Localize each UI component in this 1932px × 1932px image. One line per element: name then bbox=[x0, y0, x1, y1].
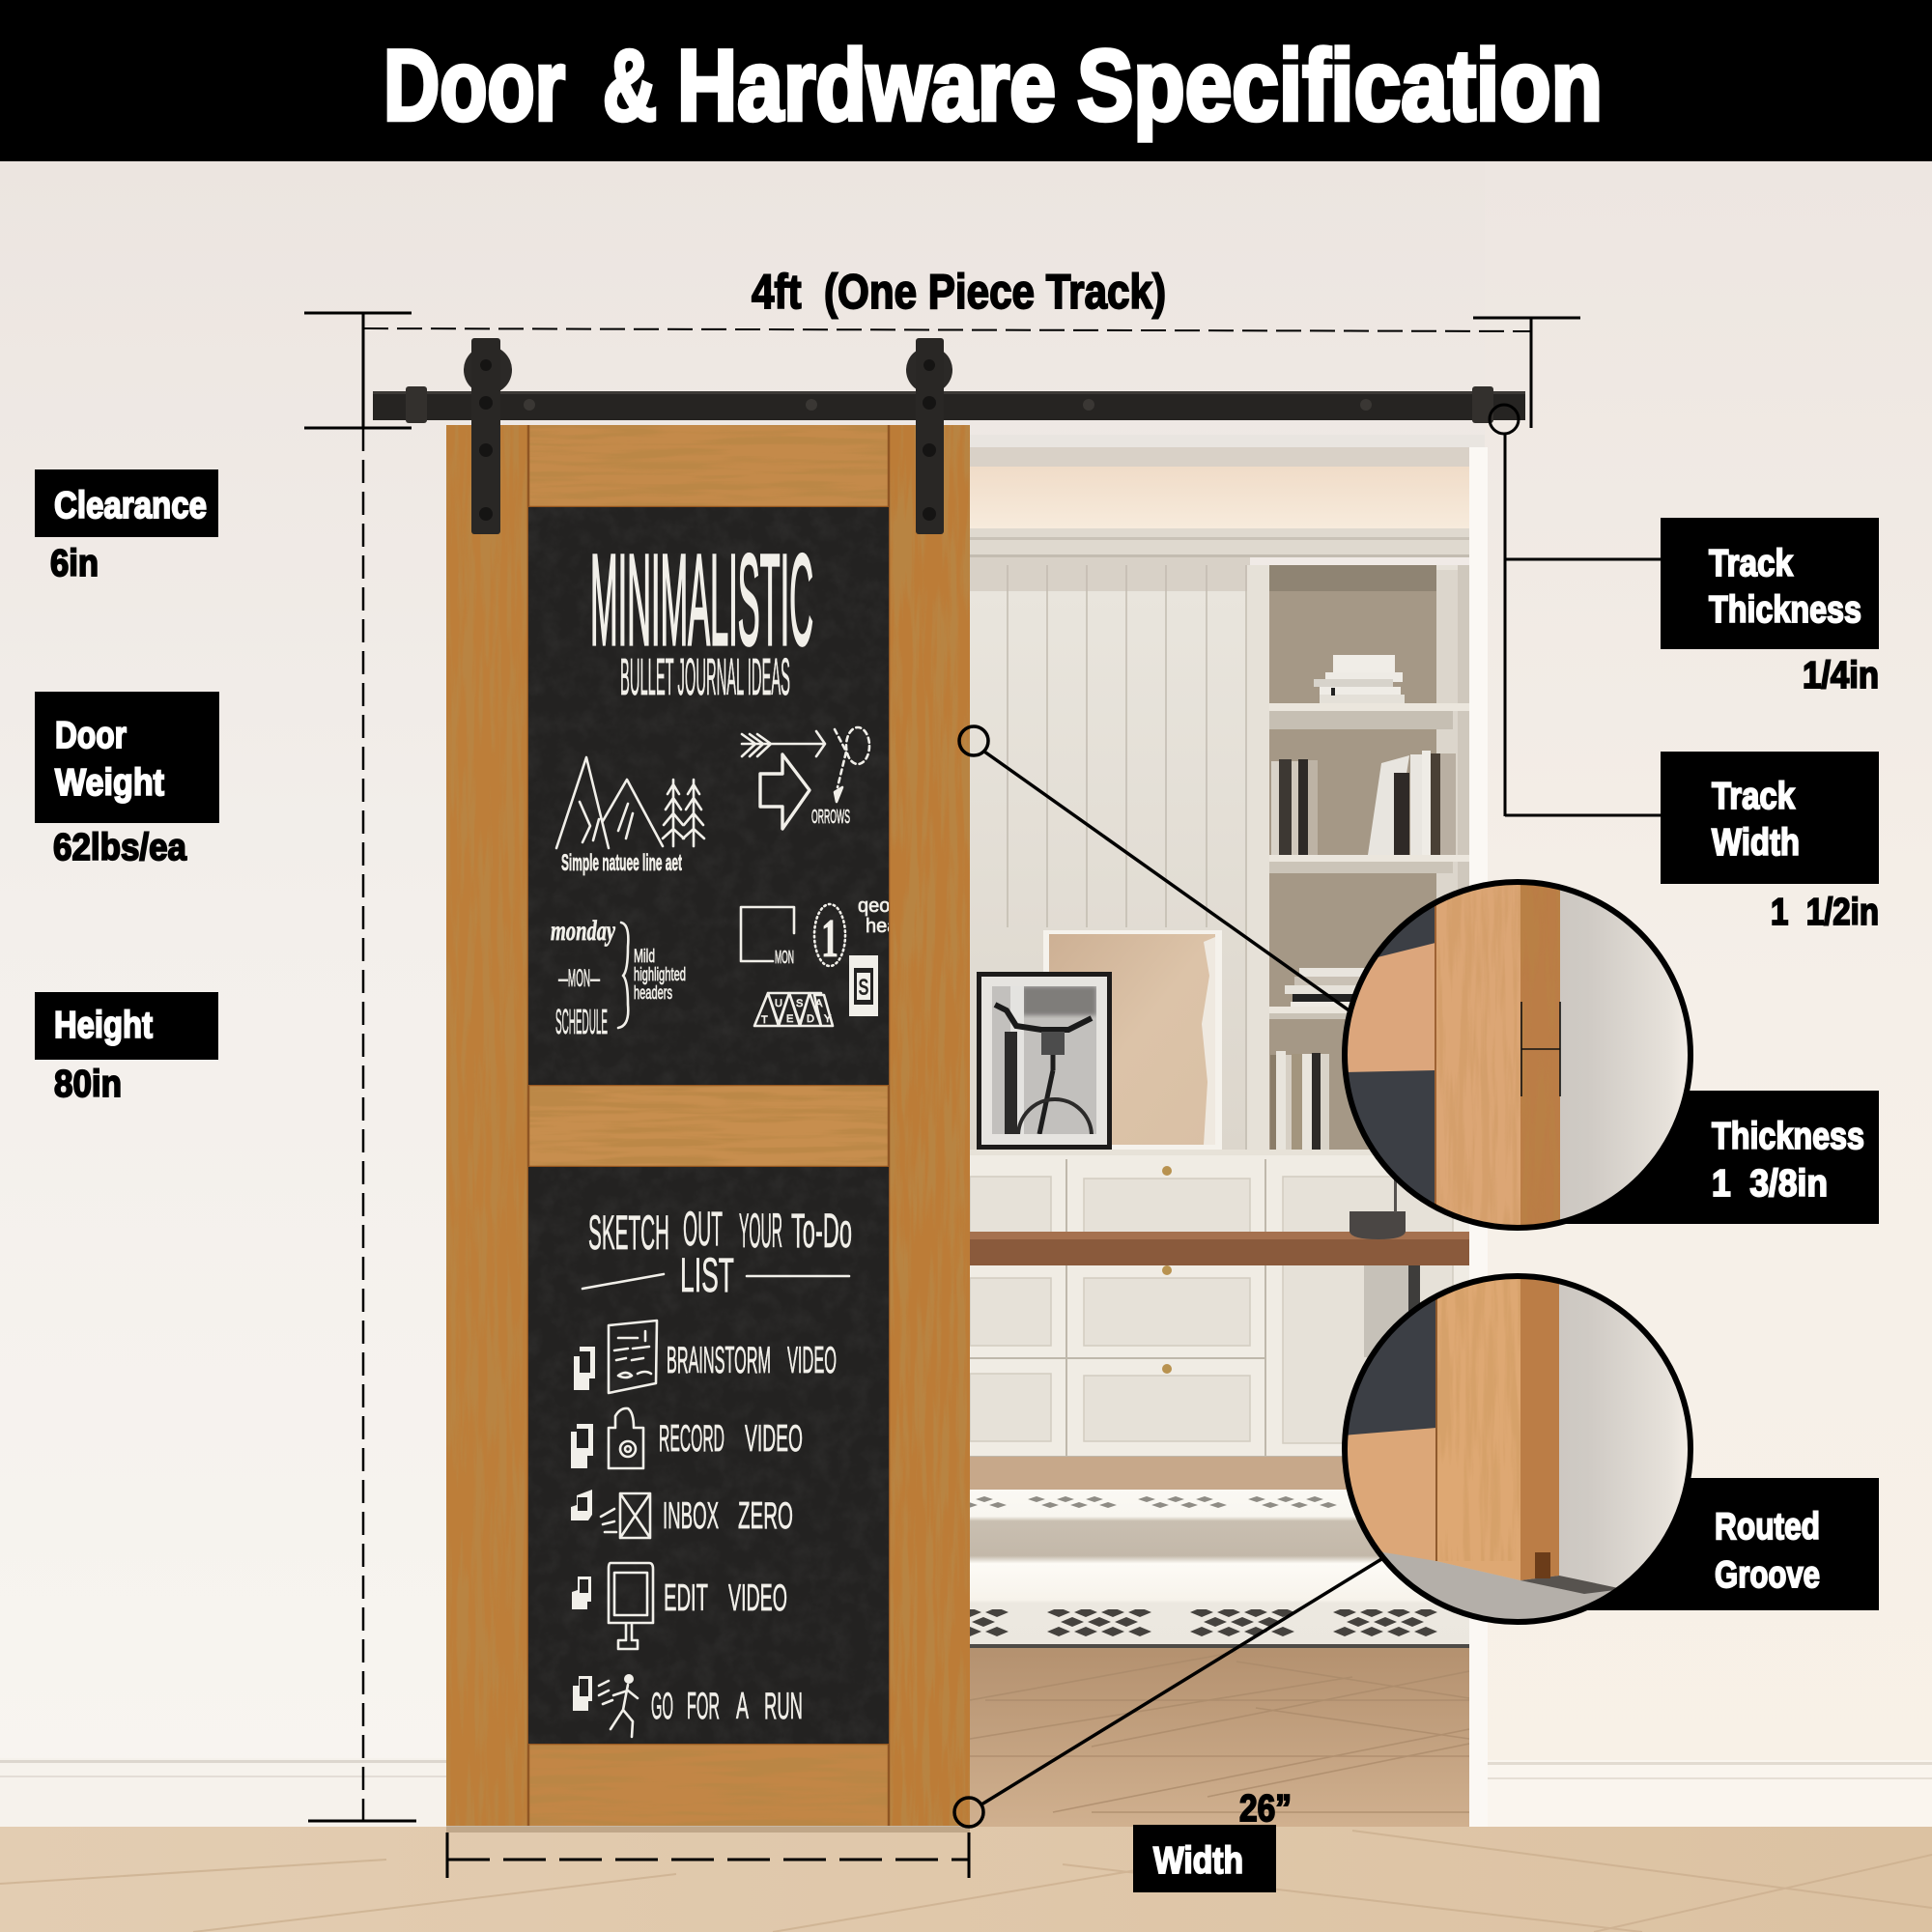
label: door weight: Door bbox=[55, 715, 127, 756]
framed artwork bbox=[1043, 930, 1222, 1150]
label: track thickness bbox=[1661, 518, 1879, 696]
row: inbox zero: ZERO bbox=[738, 1495, 793, 1537]
callout pointer: thickness bbox=[959, 726, 1354, 1014]
upper chalkboard: Simple natuee line aet bbox=[561, 850, 682, 876]
barn door bbox=[446, 425, 970, 1826]
label: track thickness: Track bbox=[1709, 543, 1793, 584]
doodle: tuesday bunting: E bbox=[786, 1013, 793, 1025]
left hanger bbox=[464, 338, 512, 534]
cabinets bbox=[970, 1150, 1469, 1459]
barn door track bbox=[373, 386, 1525, 423]
heading: sketch out your to-do bbox=[588, 1202, 852, 1260]
note: mild highlighted headers: highlighted bbox=[634, 965, 686, 985]
note: mild highlighted headers: headers bbox=[634, 983, 672, 1004]
label: track width: 1 1/2in bbox=[1771, 892, 1879, 933]
doodle: tuesday bunting: Y bbox=[824, 1013, 832, 1025]
label: routed groove: Groove bbox=[1715, 1554, 1820, 1596]
note: mild highlighted headers: Mild bbox=[634, 947, 655, 967]
desk bbox=[970, 1164, 1469, 1357]
heading: list: LIST bbox=[680, 1248, 734, 1302]
height and clearance dimension lines bbox=[304, 313, 416, 1821]
label: door weight bbox=[35, 692, 219, 868]
row: edit video bbox=[572, 1563, 787, 1649]
note: geometric headers: qeom bbox=[858, 895, 906, 917]
label: routed groove: Routed bbox=[1715, 1506, 1820, 1548]
callout pointer: routed groove bbox=[954, 1556, 1386, 1827]
label: height: 80in bbox=[54, 1064, 122, 1105]
note: geometric headers: head bbox=[866, 916, 908, 937]
title: & bbox=[603, 30, 657, 142]
barn door: BULLET JOURNAL IDEAS bbox=[620, 648, 790, 706]
framed bicycle photo bbox=[977, 972, 1112, 1150]
row: inbox zero bbox=[571, 1490, 793, 1538]
note: mild highlighted headers bbox=[634, 949, 686, 999]
label: width: 26” bbox=[1239, 1788, 1292, 1830]
label: door weight: Weight bbox=[55, 762, 164, 804]
lower chalkboard: VIDEO bbox=[745, 1418, 803, 1460]
label: thickness: Thickness bbox=[1712, 1116, 1864, 1157]
infographic: door and hardware specification: MINIMALISTIC bbox=[590, 528, 813, 672]
label: width: Width bbox=[1153, 1840, 1243, 1882]
bookcase bbox=[1247, 565, 1469, 1154]
track length label: 4ft (One Piece Track) bbox=[752, 265, 1166, 319]
doodle: tuesday bunting: D bbox=[807, 1013, 814, 1025]
lower chalkboard: To-Do bbox=[791, 1204, 852, 1258]
doodle: monday heading: monday bbox=[551, 915, 615, 947]
label: thickness bbox=[1546, 1091, 1879, 1224]
doodle: arrows bbox=[742, 727, 869, 829]
title: Hardware bbox=[677, 30, 1056, 142]
header bar bbox=[0, 0, 1932, 161]
label: routed groove bbox=[1546, 1478, 1879, 1610]
row: go for a run: A bbox=[736, 1686, 749, 1727]
note: geometric headers bbox=[858, 900, 889, 933]
label: height bbox=[35, 992, 218, 1105]
doodle: brace bbox=[618, 923, 628, 1028]
doodle: tuesday bunting bbox=[754, 993, 833, 1026]
label: track width: Width bbox=[1712, 822, 1800, 864]
label: clearance: 6in bbox=[50, 543, 99, 584]
doodle: boxed mon header bbox=[741, 907, 794, 967]
row: edit video: EDIT bbox=[664, 1577, 708, 1619]
doodle: tuesday bunting: S bbox=[796, 998, 803, 1009]
row: record video: RECORD bbox=[659, 1418, 724, 1460]
doodle: tuesday bunting: T bbox=[761, 1014, 768, 1026]
upper chalkboard bbox=[528, 507, 908, 1085]
door rails bbox=[528, 425, 889, 1826]
heading: list bbox=[582, 1248, 849, 1302]
magnifier: routed groove detail bbox=[1343, 1275, 1692, 1633]
books bbox=[1270, 655, 1456, 1150]
doodle: s badge: S bbox=[858, 975, 869, 1001]
heading: sketch out your to-do: SKETCH bbox=[588, 1206, 669, 1260]
row: brainstorm video: BRAINSTORM bbox=[667, 1340, 771, 1381]
label: thickness: 1 3/8in bbox=[1712, 1163, 1828, 1205]
upper chalkboard: ORROWS bbox=[811, 807, 850, 828]
heading: sketch out your to-do: OUT bbox=[683, 1202, 723, 1256]
row: edit video: VIDEO bbox=[728, 1577, 787, 1619]
right hanger bbox=[906, 338, 952, 534]
label: height: Height bbox=[54, 1005, 153, 1046]
upper chalkboard: —MON— bbox=[558, 965, 600, 992]
row: record video bbox=[571, 1408, 803, 1468]
floor bbox=[0, 1826, 1932, 1932]
door stiles bbox=[446, 425, 970, 1826]
upper chalkboard: SCHEDULE bbox=[555, 1002, 608, 1041]
label: clearance: Clearance bbox=[54, 485, 207, 526]
track length dimension lines bbox=[363, 318, 1580, 428]
callout pointers: track bbox=[1490, 405, 1663, 816]
row: inbox zero: INBOX bbox=[663, 1495, 719, 1537]
label: track thickness: Thickness bbox=[1709, 589, 1861, 631]
lower chalkboard bbox=[528, 1167, 889, 1744]
door jamb bbox=[970, 435, 1488, 1827]
room seen through doorway bbox=[970, 447, 1469, 1827]
label: clearance bbox=[35, 469, 218, 584]
title bbox=[384, 30, 1603, 142]
doodle: mountains and trees bbox=[556, 757, 704, 848]
upper chalkboard: MON bbox=[775, 948, 794, 967]
thickness dimension mark bbox=[1521, 1002, 1560, 1096]
lower chalkboard: RUN bbox=[764, 1686, 803, 1727]
doodle: s badge bbox=[849, 955, 878, 1016]
doodle: tuesday bunting: A bbox=[815, 998, 823, 1009]
row: go for a run: FOR bbox=[687, 1686, 720, 1727]
heading: sketch out your to-do: YOUR bbox=[739, 1204, 782, 1258]
lower chalkboard: VIDEO bbox=[787, 1340, 837, 1381]
doodle: tuesday bunting: U bbox=[775, 998, 782, 1009]
title: Door bbox=[384, 30, 565, 142]
label: width bbox=[1133, 1788, 1292, 1892]
label: track width: Track bbox=[1712, 776, 1795, 817]
doodle: numbered badge: 1 bbox=[821, 909, 838, 969]
label: track width bbox=[1661, 752, 1879, 933]
row: brainstorm video bbox=[574, 1321, 837, 1393]
width dimension bbox=[447, 1833, 969, 1878]
magnifier: door thickness detail bbox=[1343, 879, 1692, 1231]
label: track thickness: 1/4in bbox=[1803, 655, 1879, 696]
interior floor and rug bbox=[970, 1457, 1469, 1827]
wall panelling grooves bbox=[1008, 565, 1246, 1150]
row: go for a run bbox=[573, 1674, 803, 1737]
title: Specification bbox=[1077, 30, 1603, 142]
row: go for a run: GO bbox=[651, 1686, 673, 1727]
doodle: numbered badge bbox=[814, 904, 845, 969]
label: door weight: 62lbs/ea bbox=[53, 827, 186, 868]
